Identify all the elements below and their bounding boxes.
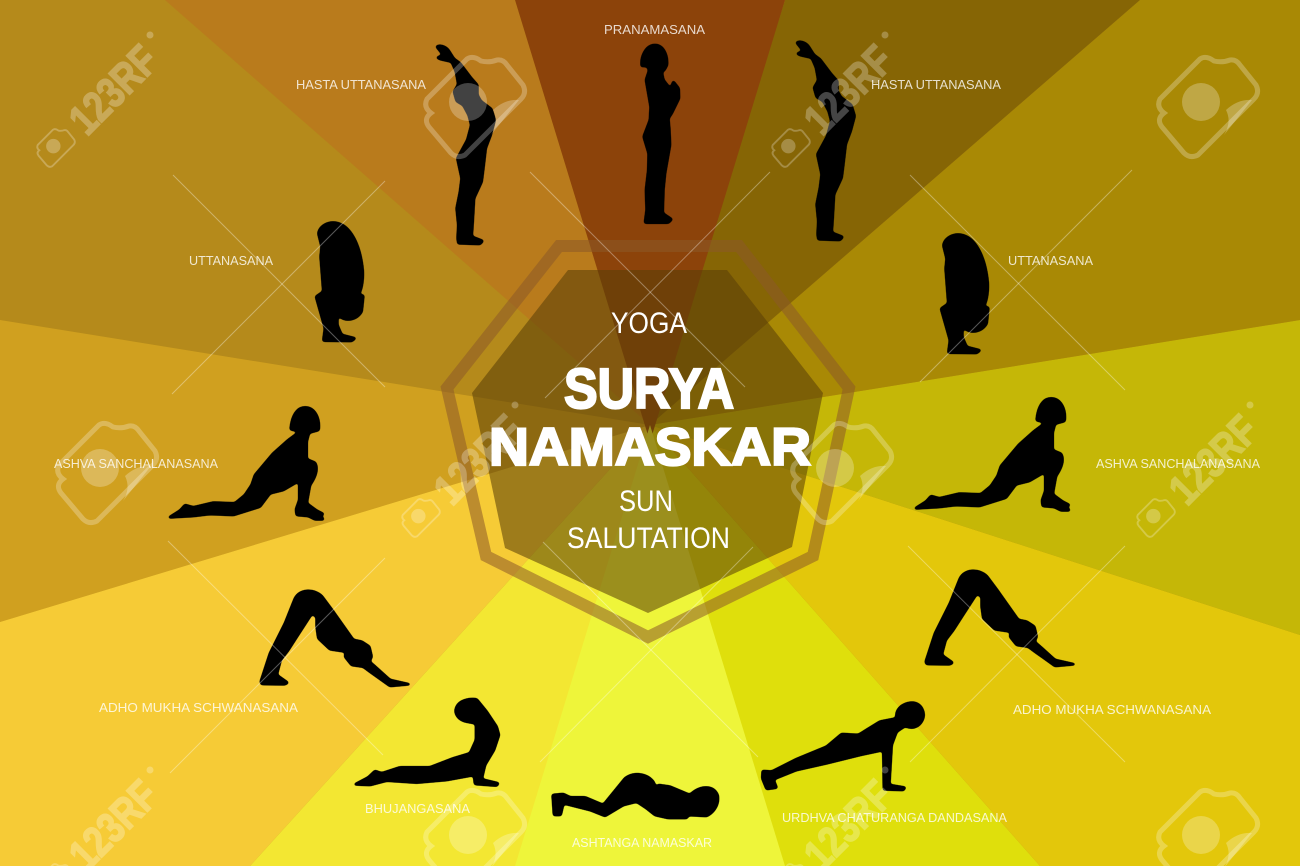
watermark: 123RF logo 4: 123RF xyxy=(1160,407,1268,514)
figure: adho mukha schwanasana left xyxy=(261,591,409,686)
figure: uttanasana right xyxy=(941,235,988,353)
label: ashva sanchalanasana right: ASHVA SANCHALANASANA xyxy=(1096,456,1260,471)
watermark: 123RF logo 5 xyxy=(37,766,168,866)
figure: ashva sanchalanasana right xyxy=(915,398,1069,510)
figure: uttanasana left xyxy=(316,223,363,341)
figure: hasta uttanasana right xyxy=(797,42,855,240)
heading: salutation: SALUTATION xyxy=(567,522,730,555)
label: adho mukha schwanasana right: ADHO MUKHA SCHWANASANA xyxy=(1013,702,1211,717)
heading: surya: SURYA xyxy=(564,357,734,421)
watermark: large egg icon 1 xyxy=(426,57,525,157)
watermark: 123RF logo 3: 123RF xyxy=(795,37,903,144)
central octagon panel xyxy=(472,270,823,613)
heading: sun: SUN xyxy=(619,485,673,518)
label: ashva sanchalanasana left: ASHVA SANCHALANASANA xyxy=(54,456,218,471)
watermark: large egg icon 3 xyxy=(58,423,157,523)
label: urdhva chaturanga dandasana: URDHVA CHATURANGA DANDASANA xyxy=(782,810,1007,825)
watermark: 123RF logo 4 xyxy=(1137,402,1268,537)
figure: hasta uttanasana left xyxy=(437,46,495,244)
figure: ashva sanchalanasana left xyxy=(169,407,323,519)
watermark: large egg icon 2 xyxy=(1159,57,1258,157)
label: uttanasana left: UTTANASANA xyxy=(189,253,273,268)
figure: bhujangasana xyxy=(355,699,499,786)
label: pranamasana: PRANAMASANA xyxy=(604,22,705,37)
figure: ashtanga namaskar xyxy=(553,774,718,818)
watermark: 123RF logo 6 xyxy=(772,766,903,866)
label: hasta uttanasana right: HASTA UTTANASANA xyxy=(871,77,1001,92)
title block xyxy=(489,307,811,555)
label: adho mukha schwanasana left: ADHO MUKHA SCHWANASANA xyxy=(99,700,298,715)
label: bhujangasana: BHUJANGASANA xyxy=(365,801,470,816)
label: ashtanga namaskar: ASHTANGA NAMASKAR xyxy=(572,835,712,850)
watermark: 123RF logo 1: 123RF xyxy=(60,37,168,144)
heading: namaskar: NAMASKAR xyxy=(489,418,811,477)
watermark: 123RF logo 3 xyxy=(772,32,903,167)
watermark: large egg icon 5 xyxy=(426,790,525,866)
yoga pose silhouettes xyxy=(169,42,1074,818)
figure: pranamasana xyxy=(642,45,679,223)
figure: adho mukha schwanasana right xyxy=(926,571,1074,666)
heading: yoga: YOGA xyxy=(611,307,687,340)
figure: urdhva chaturanga dandasana xyxy=(762,703,924,790)
central octagon outer ring xyxy=(447,246,849,637)
watermark: 123RF logo 2 xyxy=(402,402,533,537)
watermark: 123RF logo 2: 123RF xyxy=(425,407,533,514)
label: uttanasana right: UTTANASANA xyxy=(1008,253,1093,268)
watermark: large egg icon 6 xyxy=(1159,790,1258,866)
watermark: 123RF logo 1 xyxy=(37,32,168,167)
label: hasta uttanasana left: HASTA UTTANASANA xyxy=(296,77,426,92)
watermark: large egg icon 4 xyxy=(793,423,892,523)
